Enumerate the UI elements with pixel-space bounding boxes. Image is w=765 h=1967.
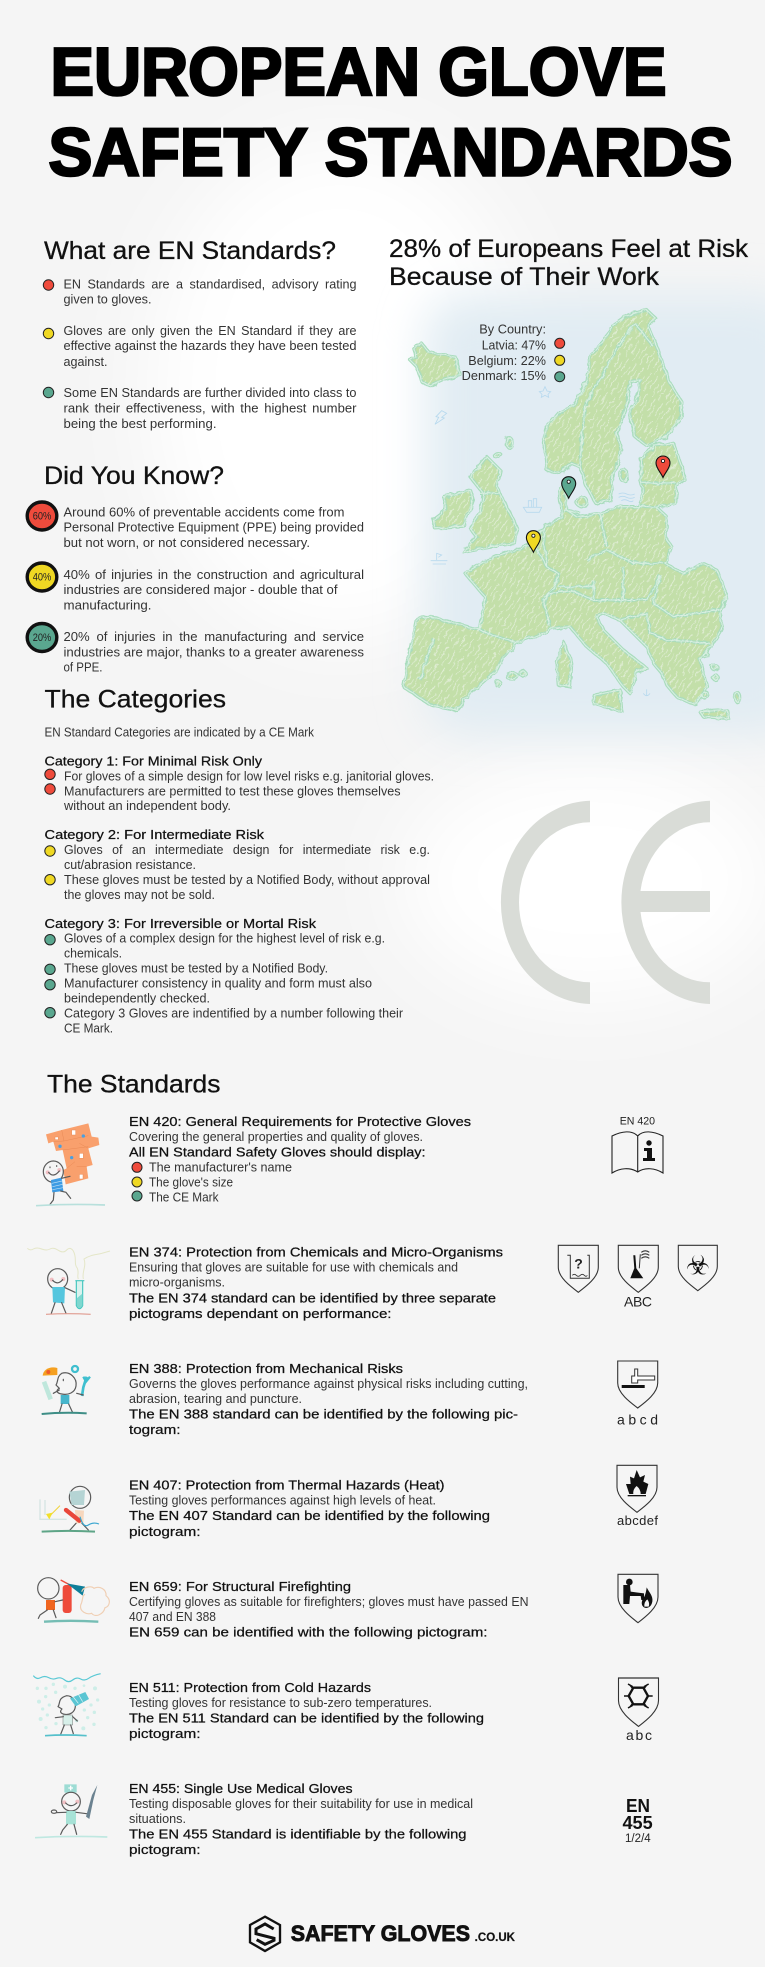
logo: Safety Gloves: SAFETY GLOVES (291, 1921, 470, 1946)
icon: CE mark (501, 801, 710, 1004)
icon: logo hexagon (250, 1917, 280, 1951)
text: EN 374: micro-organisms. (129, 1276, 225, 1290)
stat: 40 percent: manufacturing. (64, 599, 152, 613)
category 2 (44, 827, 430, 902)
pictogram: firefighting shield (618, 1574, 658, 1623)
category 1: without an independent body. (63, 799, 231, 813)
text: EN 455: EN 455: Single Use Medical Gloves (129, 1781, 353, 1796)
pictogram: heat shield: abcdef (617, 1513, 658, 1528)
standard: EN 388 (42, 1361, 658, 1437)
text: EN 388: Governs the gloves performance against physical risks including cutting, (129, 1377, 528, 1391)
heading: 28 percent of Europeans: 28% of Europeans Feel at Risk (389, 235, 749, 263)
text: EN 455 (129, 1781, 473, 1857)
text: EN 374 (129, 1245, 503, 1321)
stat: 20 percent: 20% (33, 632, 51, 644)
standard: EN 407 (40, 1465, 658, 1539)
category 3: These gloves must be tested by a Notified Body. (64, 962, 328, 976)
text: EN 420: EN 420: General Requirements for Protective Gloves (129, 1114, 471, 1129)
text: EN 455: The EN 455 Standard is identifiable by the following (129, 1827, 466, 1842)
category 3 (44, 916, 403, 1036)
text: EN 420: All EN Standard Safety Gloves should display: (129, 1144, 426, 1159)
text: EN 388 (129, 1361, 528, 1437)
text: EN 659: Certifying gloves as suitable for firefighters; gloves must have passed EN (129, 1595, 528, 1609)
stat: 20 percent: of PPE. (64, 661, 102, 675)
bullet list: EN standards definition: effective against the hazards they have been tested (64, 339, 356, 353)
category 2: Category 2: For Intermediate Risk (44, 827, 264, 842)
standard: EN 455 (35, 1781, 653, 1857)
map legend: by country: By Country: (479, 322, 546, 336)
pictogram: EN 455 mark: 1/2/4 (625, 1833, 651, 1845)
pictogram: biohazard shield: ☣ (686, 1250, 710, 1281)
standard: EN 374 (27, 1245, 717, 1321)
text: EN 511: EN 511: Protection from Cold Hazards (129, 1680, 371, 1695)
pictogram: mechanical risks shield (617, 1361, 658, 1427)
text: EN 388: togram: (129, 1422, 180, 1437)
category 3: beindependently checked. (64, 992, 210, 1006)
pictogram: biohazard shield (678, 1245, 717, 1291)
pictogram: cold shield: abc (626, 1727, 652, 1743)
pictogram: chemical resistance shield: ? (574, 1255, 583, 1271)
text: EN 374: EN 374: Protection from Chemicals and Micro-Organisms (129, 1245, 503, 1260)
bullet list: EN standards definition (43, 277, 357, 431)
heading: did you know: Did You Know? (44, 462, 224, 490)
stat: 60 percent: Personal Protective Equipment (PPE) being provided (64, 521, 364, 535)
heading: 28 percent of Europeans: Because of Their Work (389, 263, 660, 291)
text: EN 455: Testing disposable gloves for their suitability for use in medical (129, 1797, 473, 1811)
stat: 40 percent: industries are considered major - double that of (64, 583, 338, 597)
stat: 40 percent: 40% (33, 572, 51, 584)
standard: EN 659 (38, 1574, 658, 1640)
text: EN 455: pictogram: (129, 1842, 200, 1857)
illustration: welding figure (40, 1486, 99, 1532)
category 3: Manufacturer consistency in quality and form must also (64, 977, 372, 991)
text: EN 407: The EN 407 Standard can be identified by the following (129, 1508, 490, 1523)
text: EN 388: abrasion, tearing and puncture. (129, 1392, 302, 1406)
text: EN 511: pictogram: (129, 1726, 200, 1741)
text: EN 511: Testing gloves for resistance to sub-zero temperatures. (129, 1696, 432, 1710)
pictogram: cold shield (618, 1678, 658, 1743)
category 2: cut/abrasion resistance. (64, 858, 196, 872)
text: EN 388: EN 388: Protection from Mechanical Risks (129, 1361, 403, 1376)
stat: 40 percent (27, 563, 364, 613)
stat: 60 percent (27, 502, 364, 550)
standard: EN 420 (36, 1114, 663, 1206)
logo: Safety Gloves: .CO.UK (475, 1932, 516, 1944)
title (48, 34, 732, 190)
illustration: figure with test tube (27, 1248, 110, 1314)
heading: what are EN standards: What are EN Standards? (44, 237, 336, 265)
text: EN 659: EN 659 can be identified with the following pictogram: (129, 1625, 488, 1640)
map legend: by country (462, 322, 565, 383)
category 3: CE Mark. (64, 1022, 113, 1036)
panel: the categories (44, 686, 434, 1036)
stat: 60 percent: Around 60% of preventable accidents come from (64, 506, 344, 520)
category 2: the gloves may not be sold. (64, 888, 215, 902)
text: EN 659 (129, 1579, 528, 1640)
map legend: by country: Denmark: 15% (462, 369, 546, 383)
text: EN 407: Testing gloves performances against high levels of heat. (129, 1494, 436, 1508)
pictogram: EN 455 mark: 455 (622, 1813, 653, 1833)
stat: 20 percent: 20% of injuries in the manufacturing and service (64, 630, 364, 644)
map pin: Belgium (526, 531, 540, 552)
category 3: Gloves of a complex design for the highest level of risk e.g. (64, 932, 385, 946)
bullet list: EN standards definition: Gloves are only given the EN Standard if they are (64, 324, 356, 338)
text: EN 511 (129, 1680, 484, 1741)
heading: 28 percent of Europeans (389, 235, 749, 291)
illustration: figure carrying bricks (36, 1123, 105, 1206)
category 3: chemicals. (64, 947, 122, 961)
text: EN 659: 407 and EN 388 (129, 1610, 216, 1624)
bullet list: EN standards definition: given to gloves. (64, 292, 152, 306)
map pin: Latvia (656, 456, 670, 478)
pictogram: EN 455 mark (622, 1796, 653, 1845)
standard: EN 511 (33, 1674, 659, 1743)
text: EN 374: The EN 374 standard can be identified by three separate (129, 1290, 496, 1305)
stat: 20 percent: industries are major, thanks to a greater awareness (64, 646, 364, 660)
map pin: Denmark (562, 477, 576, 498)
text: EN 511: The EN 511 Standard can be identified by the following (129, 1710, 484, 1725)
bullet list: EN standards definition: being the best performing. (64, 417, 216, 431)
map legend: by country: Belgium: 22% (468, 354, 546, 368)
text: EN 407: pictogram: (129, 1524, 200, 1539)
title: SAFETY STANDARDS (48, 114, 732, 190)
text: EN 407: EN 407: Protection from Thermal Hazards (Heat) (129, 1478, 444, 1493)
category 1: For gloves of a simple design for low level risks e.g. janitorial gloves. (64, 769, 434, 783)
text: EN 455: situations. (129, 1812, 186, 1826)
category 1: Category 1: For Minimal Risk Only (44, 753, 262, 768)
category 2: These gloves must be tested by a Notified Body, without approval (64, 873, 430, 887)
stat: 60 percent: 60% (33, 510, 51, 522)
logo: Safety Gloves (250, 1917, 516, 1951)
category 3: Category 3: For Irreversible or Mortal Risk (44, 916, 316, 931)
text: EN 420 (129, 1114, 471, 1205)
illustration: figure with fire extinguisher (38, 1578, 109, 1622)
text: EN 659: EN 659: For Structural Firefighting (129, 1579, 351, 1594)
text: EN 374: Ensuring that gloves are suitable for use with chemicals and (129, 1261, 458, 1275)
map of Europe (403, 310, 740, 718)
sea icons (431, 387, 650, 696)
panel: what are EN standards (43, 237, 357, 431)
intro text: EN Standard Categories are indicated by a CE Mark (44, 726, 315, 740)
bullet list: EN standards definition: rank their effectiveness, with the highest number (64, 401, 356, 415)
illustration: figure in snow (33, 1674, 101, 1736)
map legend: by country: Latvia: 47% (482, 338, 546, 352)
text: EN 374: pictograms dependant on performance: (129, 1306, 392, 1321)
stat: 60 percent: but not worn, or not considered necessary. (64, 536, 310, 550)
heading: the standards: The Standards (47, 1071, 220, 1099)
pictogram: mechanical risks shield: abcd (617, 1411, 658, 1427)
illustration: medic with scalpel (35, 1784, 107, 1838)
pictogram: EN 420 information book (612, 1116, 663, 1173)
stat: 40 percent: 40% of injuries in the construction and agricultural (64, 568, 364, 582)
pictogram: chemical resistance shield (558, 1245, 598, 1292)
text: EN 420: The manufacturer's name (149, 1161, 292, 1175)
title: EUROPEAN GLOVE (50, 34, 666, 110)
text: EN 420: The CE Mark (149, 1191, 219, 1205)
pictogram: heat shield (617, 1465, 658, 1528)
text: EN 407 (129, 1478, 490, 1539)
heading: the categories: The Categories (44, 686, 226, 714)
pictogram: EN 420 information book: EN 420 (620, 1116, 655, 1128)
panel: did you know (27, 462, 364, 675)
category 1 (44, 753, 434, 813)
pictogram: EN 455 mark: EN (626, 1796, 650, 1816)
category 2: Gloves of an intermediate design for intermediate risk e.g. (64, 843, 430, 857)
bullet list: EN standards definition: Some EN Standards are further divided into class to (64, 386, 356, 400)
pictogram: chemical protection shield with ABC: ABC (624, 1294, 652, 1310)
category 3: Category 3 Gloves are indentified by a number following their (64, 1007, 403, 1021)
bullet list: EN standards definition: EN Standards are a standardised, advisory rating (64, 277, 356, 291)
illustration: figure with helmet and tools (42, 1366, 90, 1414)
text: EN 420: The glove's size (149, 1176, 233, 1190)
stat: 20 percent (27, 624, 364, 675)
bullet list: EN standards definition: against. (64, 355, 108, 369)
pictogram: chemical protection shield with ABC (618, 1245, 658, 1310)
text: EN 420: Covering the general properties and quality of gloves. (129, 1130, 423, 1144)
text: EN 388: The EN 388 standard can be identified by the following pic- (129, 1407, 518, 1422)
category 1: Manufacturers are permitted to test these gloves themselves (64, 784, 400, 798)
